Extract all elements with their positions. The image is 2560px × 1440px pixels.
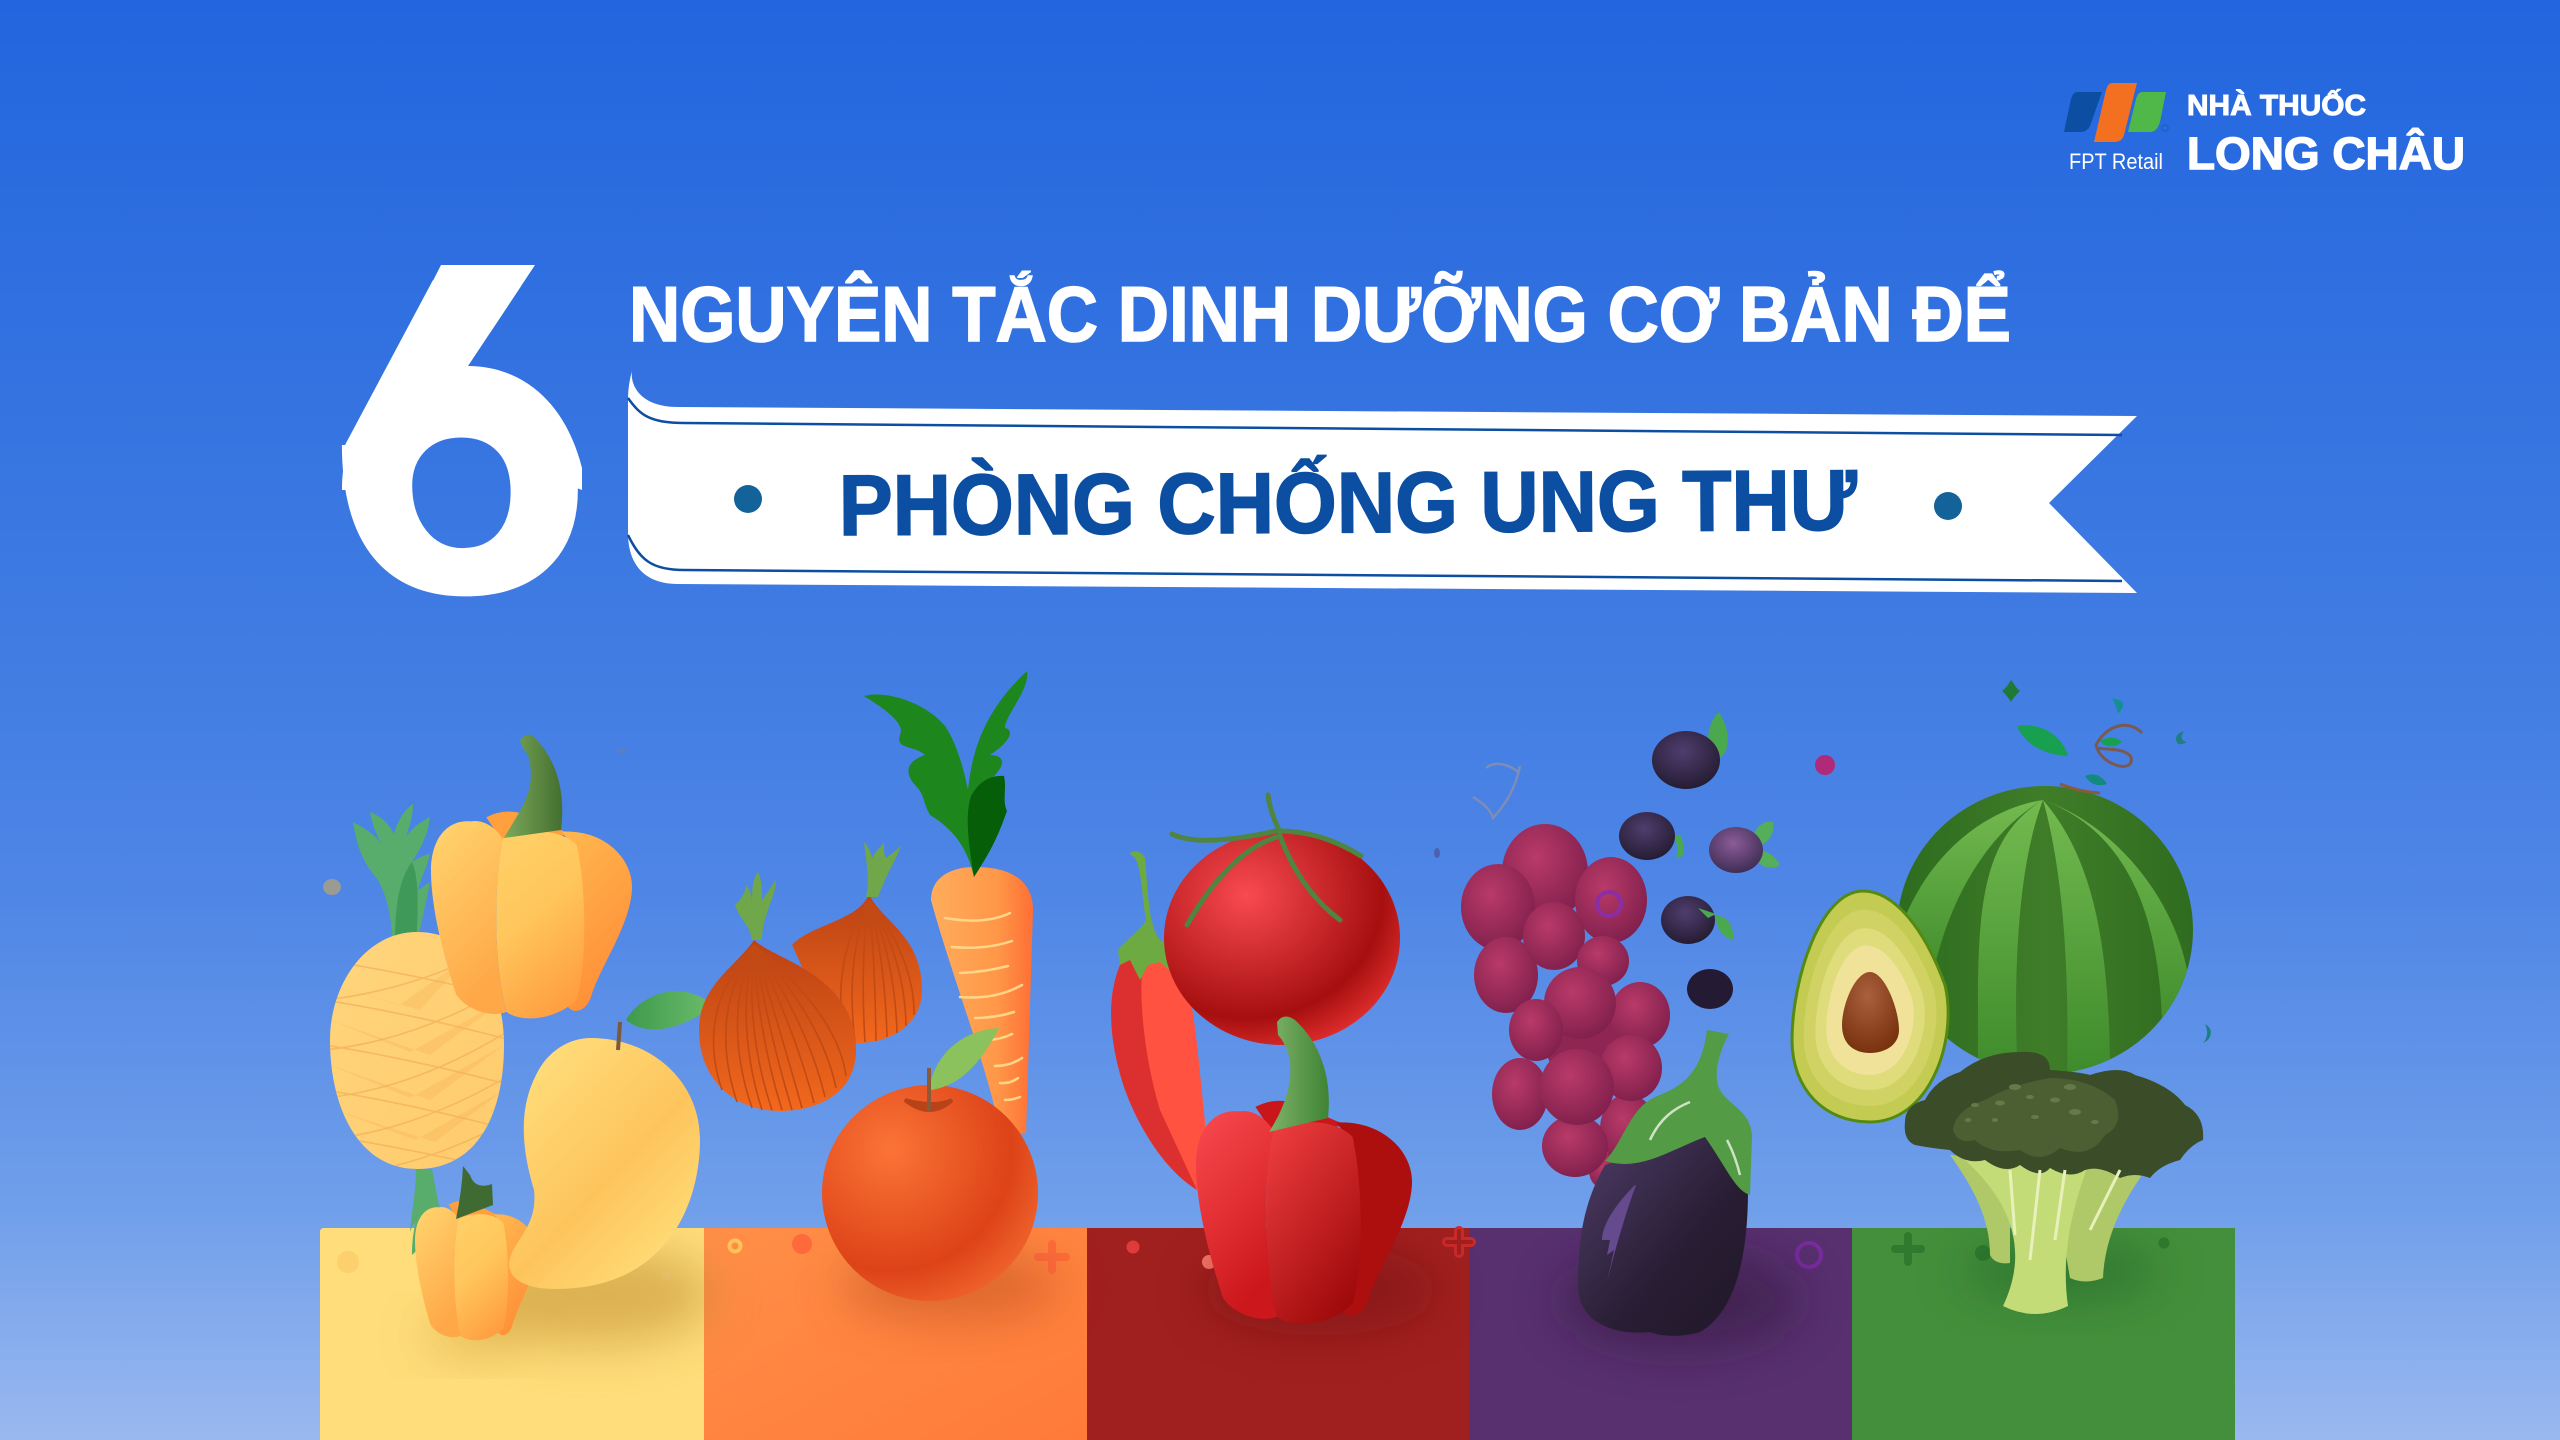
- block: orange: [704, 1228, 1087, 1440]
- logo text: FPT Retail: FPT Retail: [2069, 149, 2163, 174]
- block: green: [1852, 1228, 2235, 1440]
- broccoli main stem: [1965, 1160, 2090, 1314]
- icon: orange: [822, 1028, 1038, 1301]
- icon: mango: [509, 991, 713, 1289]
- ribbon shape: [628, 371, 2137, 593]
- block: red: [1087, 1228, 1469, 1440]
- pineapple crown: [353, 804, 430, 942]
- cast shadows on blocks: [420, 1240, 2160, 1355]
- broccoli florets: [1905, 1052, 2203, 1178]
- red group: chili, tomato, red pepper: [1111, 795, 1412, 1324]
- ribbon left dot: [734, 485, 762, 513]
- icon: broccoli: [1905, 1052, 2203, 1314]
- logo text: Nhà thuốc: NHÀ THUỐC: [2187, 88, 2366, 122]
- ribbon banner: [628, 371, 2137, 593]
- icon: chili: [1111, 851, 1207, 1190]
- block: purple: [1469, 1228, 1852, 1440]
- flying green leaves and tendrils: [2002, 680, 2211, 1043]
- icon: grapes: [1461, 824, 1670, 1189]
- colour blocks: [320, 1228, 2235, 1440]
- icon: small yellow pepper: [415, 1166, 537, 1340]
- broccoli back stems: [2060, 1160, 2153, 1282]
- icon: eggplant: [1578, 1030, 1752, 1336]
- icon: red pepper: [1196, 1016, 1412, 1324]
- carrot leaves: [864, 671, 1027, 877]
- icon: avocado: [1792, 891, 1948, 1122]
- icon: large yellow pepper: [431, 734, 632, 1018]
- icon: carrot: [864, 671, 1033, 1134]
- pineapple lower leaf: [410, 1169, 448, 1255]
- small stray specks: [323, 749, 1440, 895]
- ribbon right dot: [1934, 492, 1962, 520]
- icon: pineapple: [325, 804, 510, 1255]
- block decorations: [337, 1231, 2170, 1280]
- orange group: onions, carrot, orange: [699, 671, 1038, 1301]
- icon: back onion: [792, 842, 922, 1043]
- broccoli highlights: [2010, 1170, 2120, 1260]
- icon: watermelon: [1897, 784, 2193, 1080]
- magenta dot: [1815, 755, 1835, 775]
- title line 2: PHÒNG CHỐNG UNG THƯ: [839, 453, 1858, 554]
- ribbon bottom line: [628, 535, 2122, 581]
- pineapple body: [330, 932, 504, 1169]
- icon: FPT Retail mark: [2064, 83, 2168, 142]
- icon: front onion: [699, 872, 856, 1111]
- block: yellow: [320, 1228, 704, 1440]
- green group: watermelon, avocado, broccoli: [1792, 680, 2211, 1314]
- icon: tomato: [1164, 795, 1400, 1045]
- yellow group: pineapple, peppers, mango: [325, 734, 713, 1340]
- icon: blueberries: [1619, 712, 1780, 1009]
- ribbon top line: [628, 398, 2122, 435]
- pineapple scales: [330, 964, 504, 1166]
- title line 1: NGUYÊN TẮC DINH DƯỠNG CƠ BẢN ĐỂ: [629, 270, 2011, 358]
- big number 6: 6: [324, 183, 596, 688]
- logo: FPT Retail / Nhà thuốc Long Châu: [2064, 83, 2465, 179]
- purple group: grapes, blueberries, eggplant: [1461, 712, 1835, 1336]
- logo text: Long Châu: LONG CHÂU: [2187, 128, 2465, 179]
- grape tendril: [1473, 764, 1520, 818]
